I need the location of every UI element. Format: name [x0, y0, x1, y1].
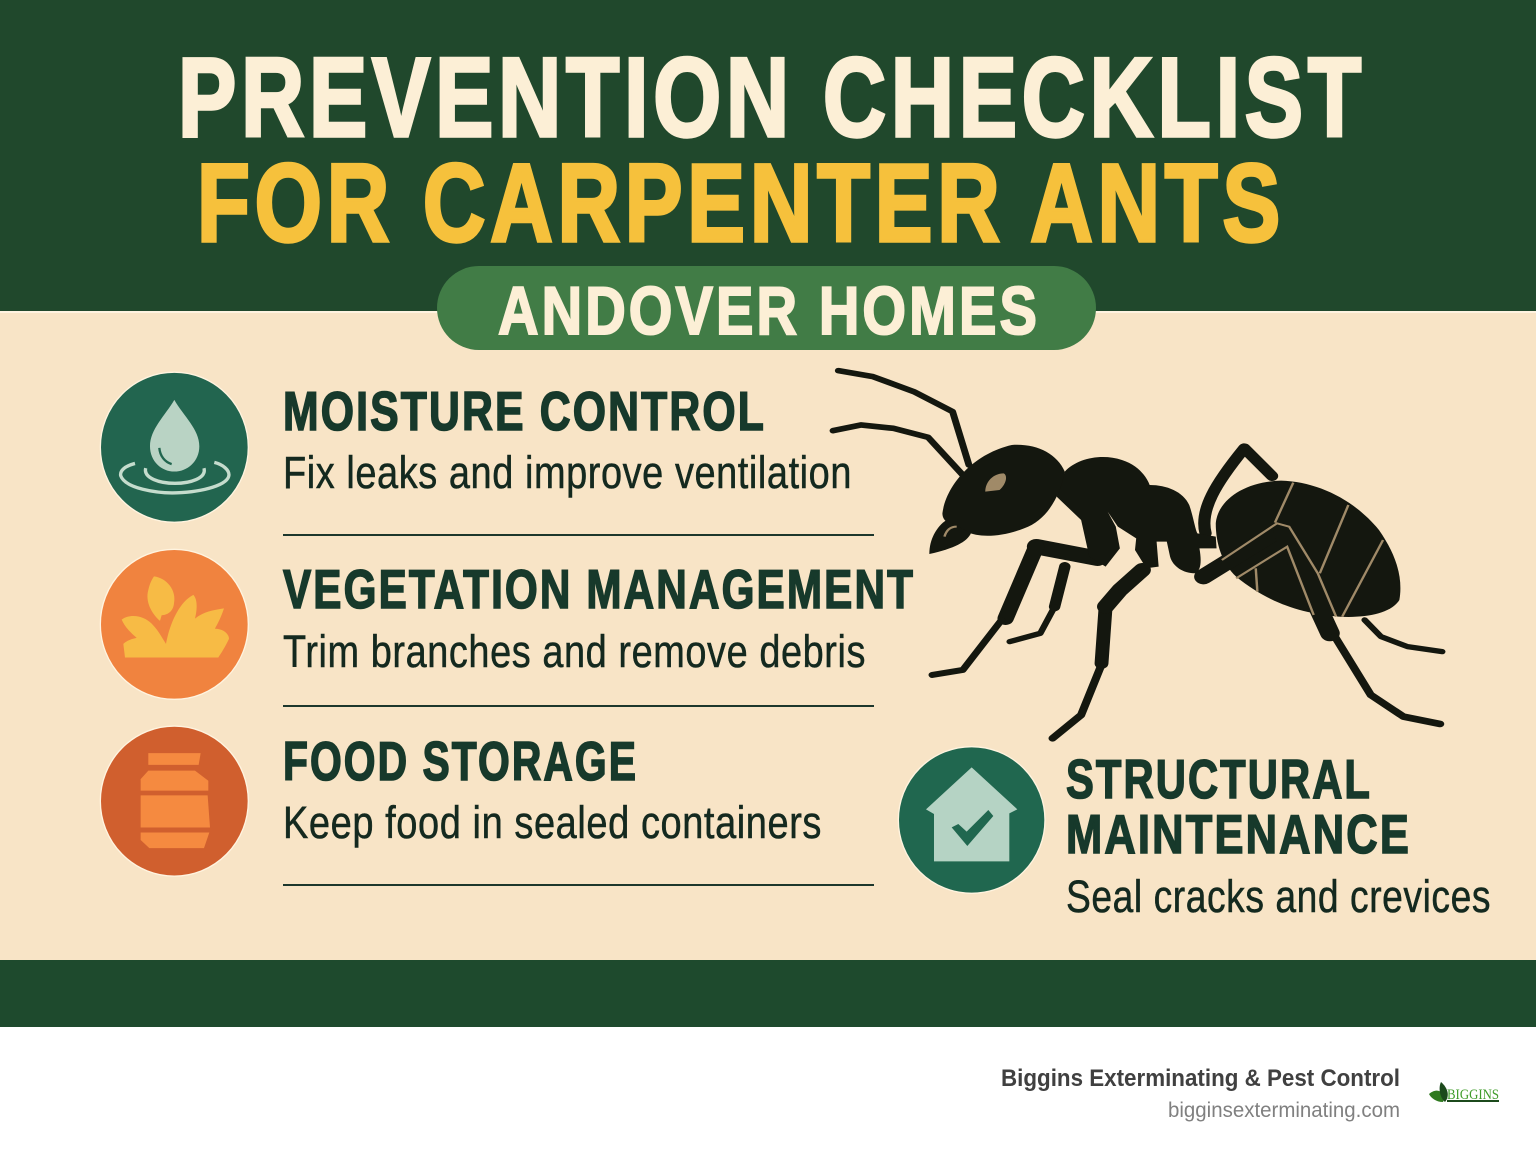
- logo: Biggins: [1429, 1082, 1499, 1103]
- item: food storage: Keep food in sealed containers: [283, 797, 822, 848]
- item: vegetation management: [283, 558, 915, 677]
- title: [178, 35, 1366, 265]
- badge: Andover Homes: ANDOVER HOMES: [498, 273, 1040, 349]
- item: food storage: [283, 730, 822, 848]
- icon: house with check: [898, 747, 1045, 893]
- item: structural maintenance: MAINTENANCE: [1066, 803, 1411, 865]
- footer credit: [1001, 1065, 1400, 1122]
- item: food storage: FOOD STORAGE: [283, 730, 638, 792]
- item: moisture control: [283, 380, 852, 498]
- footer band: [0, 960, 1536, 1027]
- item: structural maintenance: [1066, 748, 1491, 922]
- header band: [0, 0, 1536, 311]
- item: structural maintenance: STRUCTURAL: [1066, 748, 1372, 810]
- footer credit: Biggins Exterminating & Pest Control: [1001, 1065, 1400, 1092]
- logo: Biggins: BIGGINS: [1447, 1087, 1499, 1103]
- footer credit: bigginsexterminating.com: [1168, 1099, 1400, 1122]
- item: vegetation management: Trim branches and remove debris: [283, 626, 866, 677]
- illustration: carpenter ant: [833, 371, 1442, 738]
- icon: water drop: [100, 372, 248, 522]
- icon: food jar: [100, 726, 248, 876]
- icon: vegetation: [100, 549, 248, 699]
- item: moisture control: MOISTURE CONTROL: [283, 380, 766, 442]
- item: moisture control: Fix leaks and improve ventilation: [283, 447, 852, 498]
- item: vegetation management: VEGETATION MANAGEMENT: [283, 558, 915, 620]
